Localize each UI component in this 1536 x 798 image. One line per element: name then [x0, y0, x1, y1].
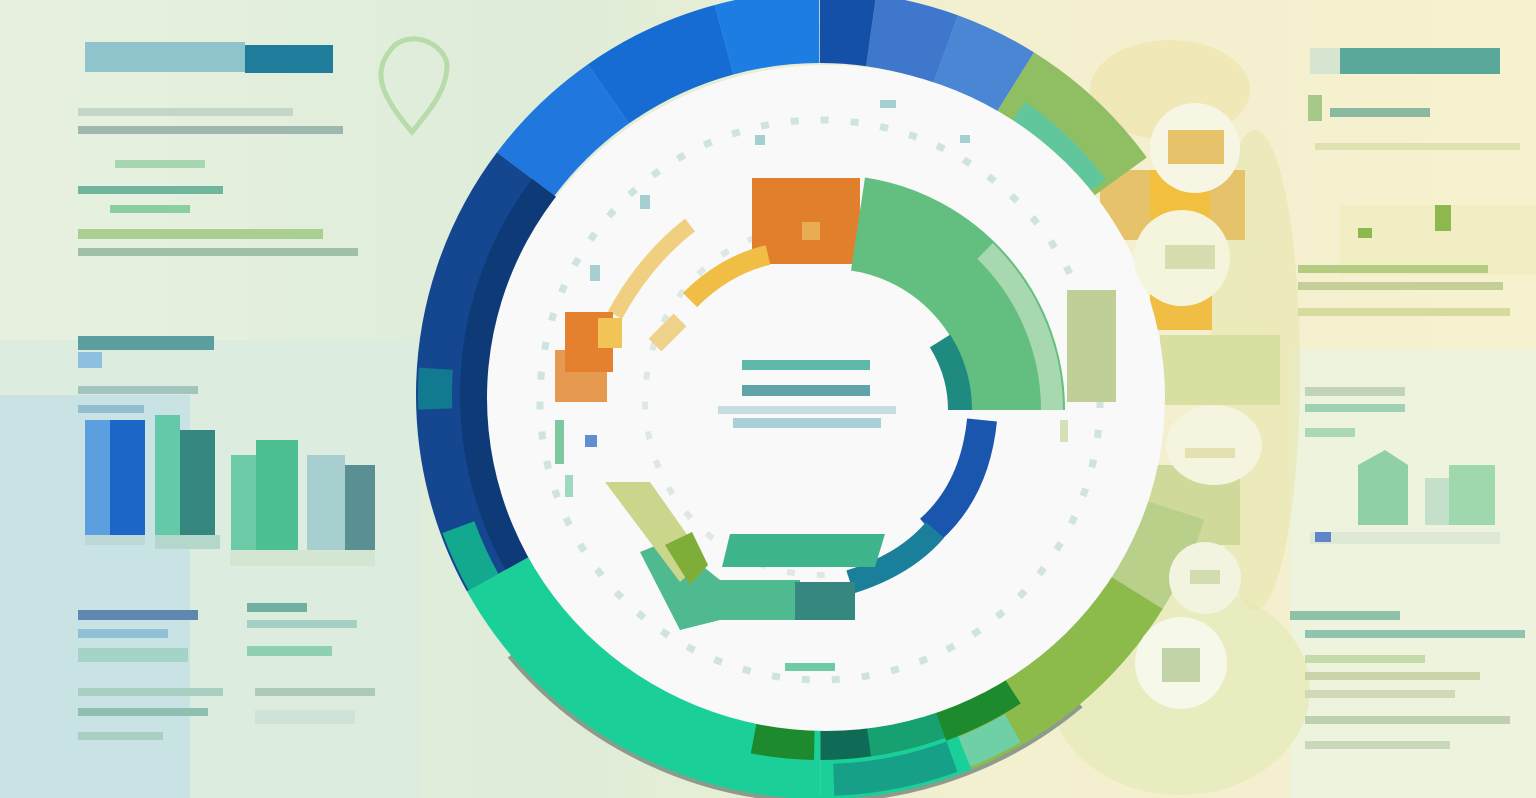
- icon circle 4: [1169, 542, 1241, 614]
- text block: bottom left: [78, 603, 375, 740]
- icon circle 1: [1150, 103, 1240, 193]
- header: right title: [1310, 48, 1500, 74]
- icon: location pin: [381, 39, 447, 132]
- dotted arcs: [540, 120, 1100, 680]
- segment: orange square: [752, 178, 860, 264]
- gauge: outer ring: [416, 0, 1224, 798]
- segment: green arc: [858, 224, 1052, 410]
- text block: right intro: [1298, 95, 1536, 316]
- dotted small marks: [555, 100, 1068, 497]
- segment: yellow arcs: [615, 225, 768, 345]
- segment: olive block: [1067, 290, 1116, 402]
- section heading: bar chart: [78, 336, 214, 413]
- icon circle 3: [1166, 405, 1262, 485]
- centre text: [718, 360, 896, 428]
- bar chart: [85, 415, 375, 566]
- text block: bottom right: [1290, 611, 1525, 749]
- header: left title: [85, 42, 333, 73]
- segment: bottom green arcs: [605, 482, 885, 671]
- right column backdrop: yellow band: [1100, 170, 1280, 545]
- icon circle 5: [1135, 617, 1227, 709]
- text block: left intro: [78, 108, 358, 256]
- segment: blue lower arc: [850, 420, 982, 582]
- section heading: right bar chart: [1305, 387, 1405, 437]
- gauge: white centre: [487, 65, 1165, 731]
- icon circle 2: [1134, 210, 1230, 306]
- bar chart: right: [1310, 450, 1500, 544]
- segment: orange block: [555, 312, 622, 402]
